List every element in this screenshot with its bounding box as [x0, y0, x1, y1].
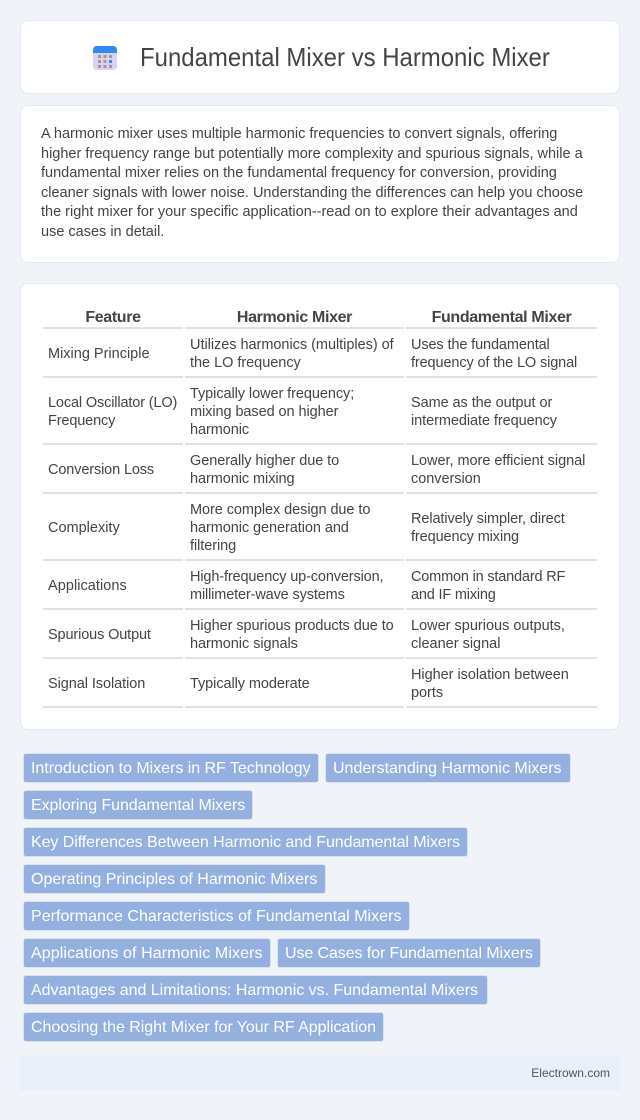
tag: [23, 1012, 384, 1042]
row: spurious output: Higher spurious products due to: [190, 618, 394, 634]
column heading: harmonic mixer: Harmonic Mixer: [237, 309, 352, 326]
row: complexity: filtering: [190, 538, 236, 554]
row: applications: [48, 569, 565, 603]
row: complexity: Complexity: [48, 520, 120, 536]
row: conversion loss: conversion: [411, 471, 481, 487]
row: applications: High-frequency up-conversion,: [190, 569, 383, 585]
row: spurious output: cleaner signal: [411, 636, 500, 652]
title: Fundamental Mixer vs Harmonic Mixer: [140, 42, 550, 72]
intro text: [41, 126, 583, 240]
row: mixing principle: frequency of the LO signal: [411, 355, 577, 371]
footer bar: [20, 1056, 620, 1090]
intro text: A harmonic mixer uses multiple harmonic frequencies to convert signals, offering: [41, 126, 557, 142]
row: conversion loss: Lower, more efficient signal: [411, 453, 585, 469]
row: local oscillator frequency: Typically lower frequency;: [190, 386, 354, 402]
row: local oscillator frequency: mixing based on higher: [190, 404, 338, 420]
row: complexity: harmonic generation and: [190, 520, 349, 536]
row: complexity: Relatively simpler, direct: [411, 511, 565, 527]
tag: Understanding Harmonic Mixers: [333, 760, 562, 777]
column heading: feature: Feature: [85, 309, 141, 326]
row: signal isolation: ports: [411, 685, 443, 701]
row: signal isolation: Signal Isolation: [48, 676, 145, 692]
intro text: use cases in detail.: [41, 224, 164, 240]
row: applications: Applications: [48, 578, 127, 594]
row: conversion loss: Generally higher due to: [190, 453, 339, 469]
row: spurious output: Spurious Output: [48, 627, 151, 643]
comparison table: [43, 309, 597, 708]
comparison table panel: [20, 283, 620, 730]
row: local oscillator frequency: [48, 386, 557, 438]
row: conversion loss: Conversion Loss: [48, 462, 154, 478]
intro text: the right mixer for your specific application--read on to explore their advantages and: [41, 204, 578, 220]
footer credit: Electrown.com: [531, 1066, 610, 1080]
intro text: fundamental mixer relies on the fundamental frequency for conversion, providing: [41, 165, 557, 181]
intro text: higher frequency range but potentially more complexity and spurious signals, while a: [41, 146, 583, 162]
row: signal isolation: Higher isolation between: [411, 667, 569, 683]
tag: Exploring Fundamental Mixers: [31, 797, 245, 814]
intro panel: [20, 105, 620, 263]
row: spurious output: [48, 618, 565, 652]
icon: calendar: [93, 46, 117, 70]
tag: [277, 938, 541, 968]
tag: [23, 864, 326, 894]
row: complexity: frequency mixing: [411, 529, 519, 545]
tag: Introduction to Mixers in RF Technology: [31, 760, 311, 777]
row: mixing principle: Mixing Principle: [48, 346, 150, 362]
tag: Key Differences Between Harmonic and Fundamental Mixers: [31, 834, 460, 851]
row: applications: and IF mixing: [411, 587, 496, 603]
column heading: fundamental mixer: Fundamental Mixer: [432, 309, 571, 326]
row: signal isolation: [48, 667, 569, 701]
row: local oscillator frequency: harmonic: [190, 422, 249, 438]
row: local oscillator frequency: intermediate frequency: [411, 413, 557, 429]
tag: [23, 901, 410, 931]
row: local oscillator frequency: Same as the output or: [411, 395, 552, 411]
tag: [23, 975, 488, 1005]
tag: [23, 827, 468, 857]
row: spurious output: harmonic signals: [190, 636, 298, 652]
intro text: cleaner signals with lower noise. Understanding the differences can help you choose: [41, 184, 583, 200]
tag: Choosing the Right Mixer for Your RF Application: [31, 1019, 376, 1036]
header panel: [20, 20, 620, 94]
row: complexity: More complex design due to: [190, 502, 370, 518]
row: spurious output: Lower spurious outputs,: [411, 618, 565, 634]
tag: [23, 938, 271, 968]
tag: [23, 753, 319, 783]
row: mixing principle: the LO frequency: [190, 355, 301, 371]
tag: Performance Characteristics of Fundamental Mixers: [31, 908, 402, 925]
tag: Advantages and Limitations: Harmonic vs. Fundamental Mixers: [31, 982, 478, 999]
row: conversion loss: [48, 453, 585, 487]
row: applications: Common in standard RF: [411, 569, 565, 585]
tag: Operating Principles of Harmonic Mixers: [31, 871, 317, 888]
row: local oscillator frequency: Frequency: [48, 413, 115, 429]
row: local oscillator frequency: Local Oscillator (LO): [48, 395, 177, 411]
row: signal isolation: Typically moderate: [190, 676, 310, 692]
row: conversion loss: harmonic mixing: [190, 471, 295, 487]
topic tags: [23, 753, 571, 1042]
row: complexity: [48, 502, 565, 554]
tag: [325, 753, 571, 783]
row: mixing principle: [48, 337, 577, 371]
row: mixing principle: Utilizes harmonics (multiples) of: [190, 337, 394, 353]
row: applications: millimeter-wave systems: [190, 587, 345, 603]
tag: Applications of Harmonic Mixers: [31, 945, 263, 962]
tag: Use Cases for Fundamental Mixers: [285, 945, 533, 962]
tag: [23, 790, 253, 820]
row: mixing principle: Uses the fundamental: [411, 337, 550, 353]
